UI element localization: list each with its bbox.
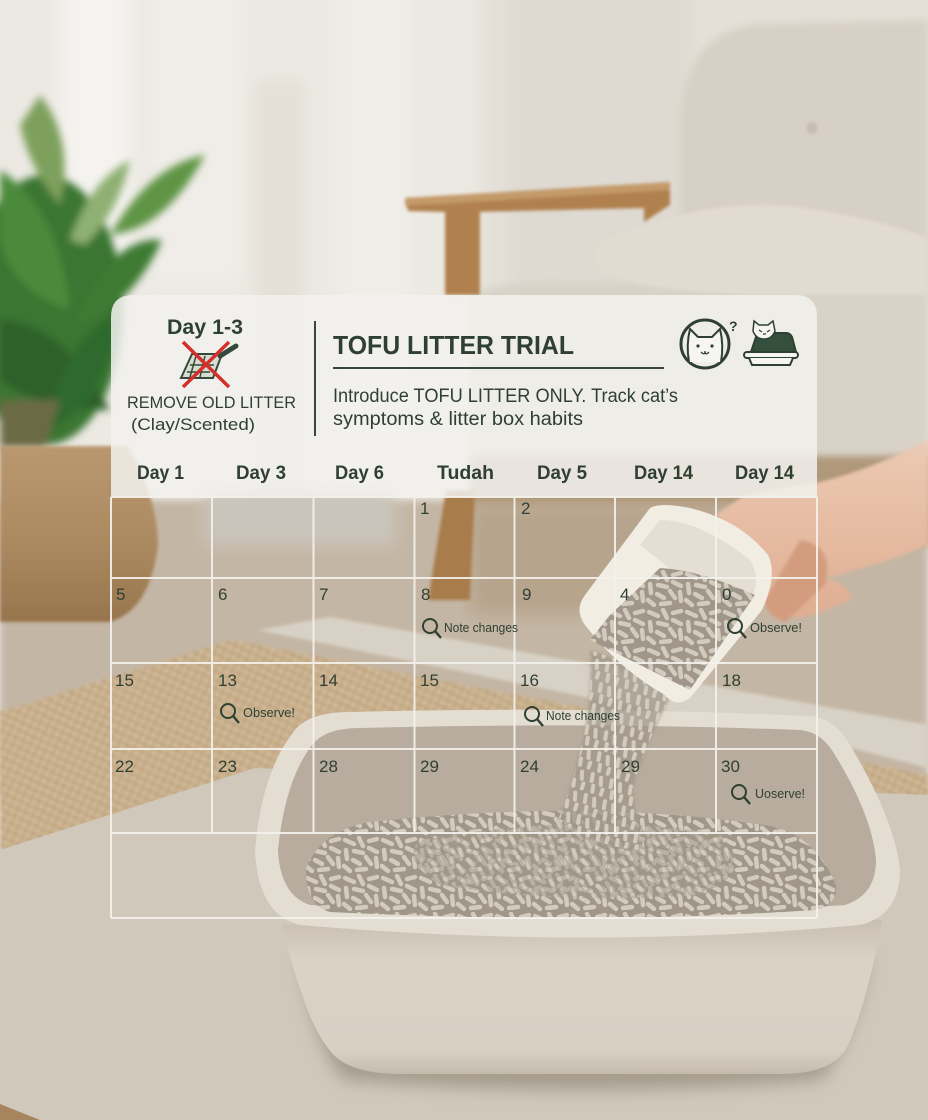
instruction text	[127, 393, 296, 434]
weekday header row: Day 6	[335, 463, 384, 484]
note: note changes, day 8: Note changes	[444, 621, 518, 635]
day numbers: 16	[520, 671, 539, 690]
darker floor under sofa	[470, 505, 730, 615]
weekday header row: Day 14	[634, 463, 693, 484]
litter box	[255, 710, 900, 1090]
wooden armrest and leg	[405, 182, 670, 600]
day range label: Day 1-3	[167, 316, 243, 339]
day numbers: 7	[319, 585, 328, 604]
note: note changes, day 16: Note changes	[546, 709, 620, 723]
day numbers: 9	[522, 585, 531, 604]
day numbers: 15	[420, 671, 439, 690]
wood floor corner	[0, 1104, 40, 1120]
day numbers: 22	[115, 757, 134, 776]
note: observe, top right: Observe!	[750, 621, 802, 635]
day numbers: 23	[218, 757, 237, 776]
box interior	[278, 725, 876, 915]
day numbers: 29	[621, 757, 640, 776]
note: note changes, day 8	[423, 619, 518, 638]
title: TOFU LITTER TRIAL	[333, 330, 574, 360]
pouring pellet stream	[558, 650, 680, 850]
contact shadow	[300, 960, 870, 1090]
note: observe, day 13: Observe!	[243, 706, 295, 720]
day numbers: 8	[421, 585, 430, 604]
day numbers: 1	[420, 499, 429, 518]
day numbers: 5	[116, 585, 125, 604]
weekday header row	[137, 463, 794, 484]
day numbers: 14	[319, 671, 338, 690]
description	[333, 386, 678, 430]
instruction text: REMOVE OLD LITTER	[127, 393, 296, 412]
step: day 1-3 block	[127, 316, 296, 434]
day numbers: 24	[520, 757, 539, 776]
weekday header row: Day 3	[236, 463, 286, 484]
day numbers: 29	[420, 757, 439, 776]
note: observe, day 13	[221, 704, 295, 723]
header frosted panel	[111, 295, 817, 497]
day numbers: 6	[218, 585, 227, 604]
calendar grid	[111, 497, 817, 918]
question mark: ?	[729, 318, 738, 334]
note: observe, day 30	[732, 785, 805, 804]
panel: calendar	[111, 295, 817, 918]
icon: crossed-out old litter scoop	[181, 342, 236, 387]
day numbers: 30	[721, 757, 740, 776]
sofa pillow	[594, 205, 928, 295]
curtain hem reflections	[205, 490, 395, 545]
weekday header row: Day 5	[537, 463, 587, 484]
basket	[0, 446, 158, 622]
litter pellets in box	[306, 811, 836, 918]
weekday header row: Tudah	[437, 463, 494, 484]
sofa	[470, 20, 928, 545]
note: note changes, day 16	[525, 707, 620, 726]
scoop	[580, 505, 772, 702]
icon: cat in litter box	[744, 321, 798, 365]
wall and curtains	[0, 0, 928, 540]
description: Introduce TOFU LITTER ONLY. Track cat’s	[333, 386, 678, 407]
day numbers	[115, 499, 741, 776]
day numbers: 2	[521, 499, 530, 518]
floor	[0, 500, 928, 800]
day numbers: 0	[722, 585, 731, 604]
pale rug strip	[258, 617, 928, 768]
icon: cat face	[681, 320, 729, 368]
weekday header row: Day 1	[137, 463, 184, 484]
note: observe, top right	[728, 619, 802, 638]
box body	[282, 920, 882, 1074]
woven rug	[0, 640, 928, 860]
instruction text: (Clay/Scented)	[131, 415, 255, 434]
hand	[715, 440, 928, 622]
box rim	[255, 710, 900, 938]
note: observe, day 30: Uoserve!	[755, 787, 805, 801]
day numbers: 4	[620, 585, 629, 604]
day numbers: 13	[218, 671, 237, 690]
description: symptoms & litter box habits	[333, 409, 583, 430]
day numbers: 28	[319, 757, 338, 776]
plant	[0, 95, 205, 448]
day numbers: 18	[722, 671, 741, 690]
weekday header row: Day 14	[735, 463, 794, 484]
day numbers: 15	[115, 671, 134, 690]
carpet	[0, 768, 928, 1120]
sofa button	[806, 122, 818, 134]
